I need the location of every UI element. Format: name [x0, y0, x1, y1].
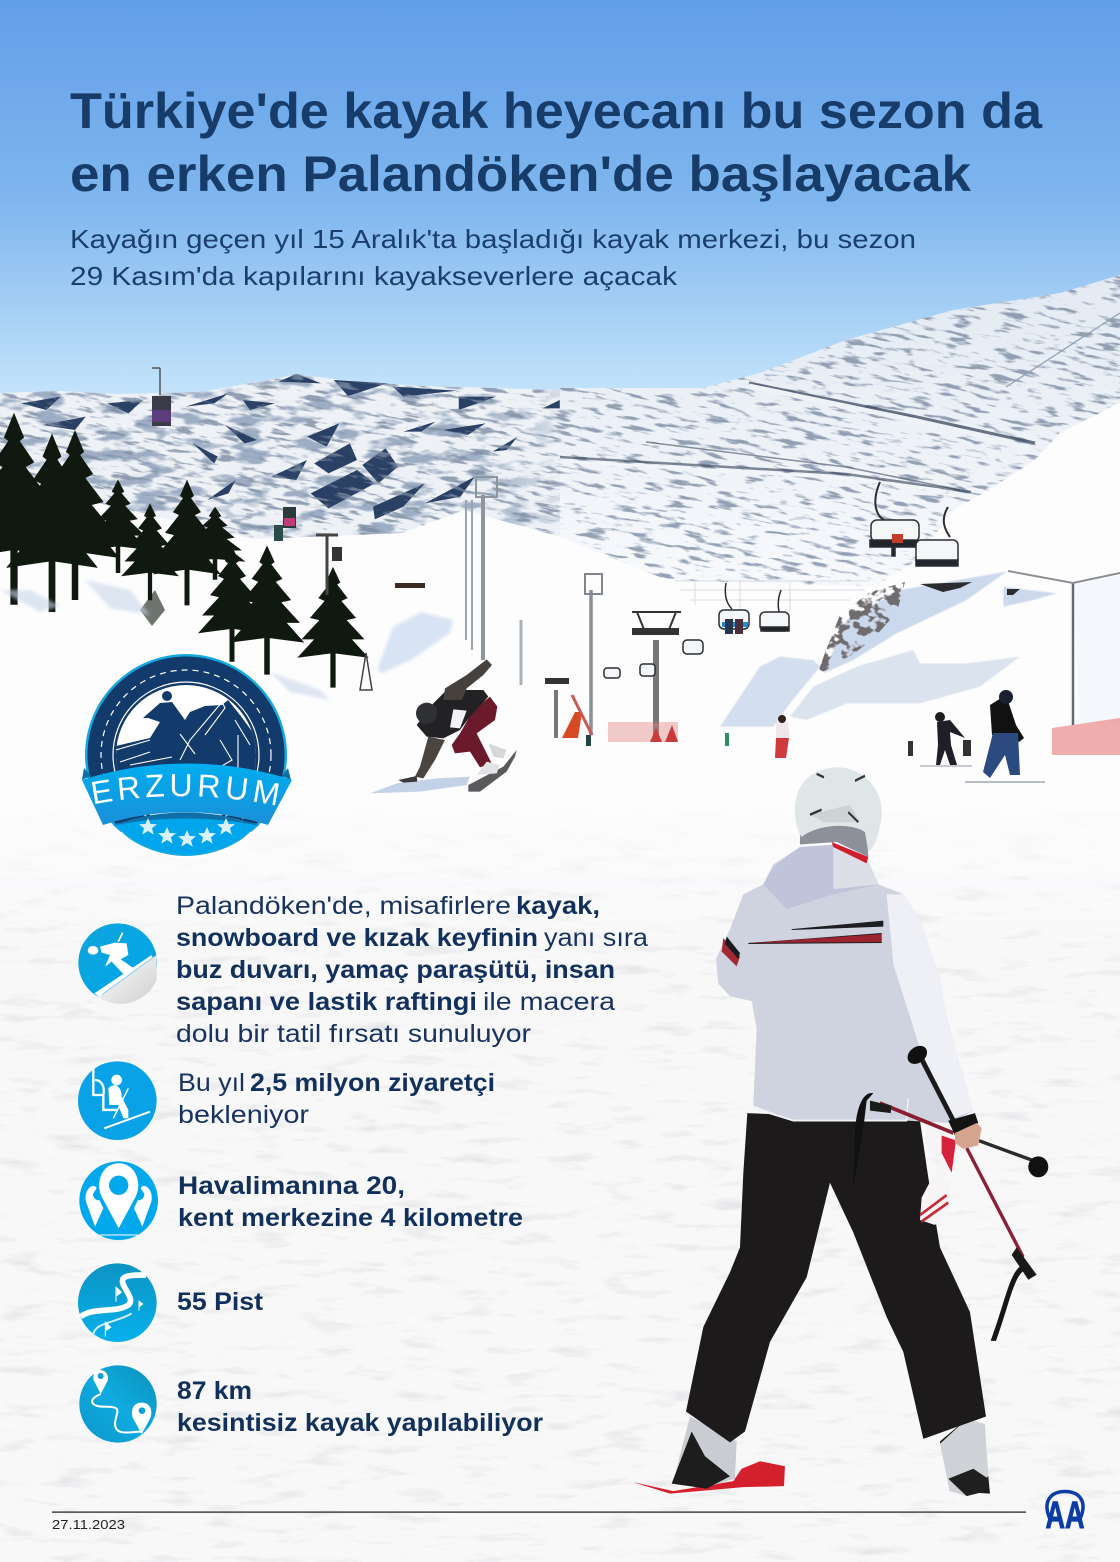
text block: kilometres — [177, 1377, 543, 1437]
sky background — [0, 0, 1120, 402]
logo: Anadolu Agency — [1046, 1492, 1084, 1537]
icon: location pin — [79, 1161, 158, 1240]
right mountain slope — [0, 275, 1120, 586]
text block: activities — [176, 892, 648, 1048]
lower snow tone — [0, 800, 1120, 1562]
subtitle: 29 Kasım'da kapılarını kayakseverlere açacak — [70, 261, 678, 291]
subtitle: Kayağın geçen yıl 15 Aralık'ta başladığı kayak merkezi, bu sezon — [70, 224, 916, 254]
ski lift towers — [466, 477, 1120, 738]
gondola lift cabins — [152, 368, 425, 690]
chairlift seats — [604, 482, 958, 678]
text block: activities: Palandöken'de, misafirlere — [176, 892, 511, 920]
icon: route — [79, 1365, 157, 1443]
snow ground base — [0, 400, 1120, 1562]
snow texture — [0, 800, 1120, 1562]
badge: Erzurum — [82, 654, 292, 856]
footer rule — [52, 1512, 1026, 1513]
faint fence — [675, 580, 870, 612]
text block: activities: kayak, — [516, 892, 600, 920]
text block: activities: yanı sıra — [544, 924, 648, 952]
rocky snow hump — [720, 572, 1120, 727]
subtitle — [70, 224, 916, 291]
title: en erken Palandöken'de başlayacak — [70, 146, 971, 202]
text block: distance: Havalimanına 20, — [178, 1172, 405, 1200]
icon: winding piste — [78, 1263, 157, 1342]
text block: visitors: 2,5 milyon ziyaretçi — [250, 1069, 495, 1097]
text block: kilometres: 87 km — [177, 1377, 252, 1405]
text block: visitors — [178, 1069, 495, 1129]
text block: activities: ile macera — [483, 988, 615, 1016]
badge illustration: skier and mountains — [116, 691, 256, 770]
mid snowboarder — [370, 659, 517, 793]
text block: activities: dolu bir tatil fırsatı sunuluyor — [176, 1020, 531, 1048]
text block: kilometres: kesintisiz kayak yapılabiliyor — [177, 1409, 543, 1437]
text block: visitors: bekleniyor — [178, 1101, 309, 1129]
icon: chairlift — [78, 1061, 157, 1140]
title — [70, 83, 1043, 202]
text block: activities: snowboard ve kızak keyfinin — [176, 924, 538, 952]
small snow mound — [377, 612, 453, 673]
back mountain range — [0, 374, 560, 539]
tree shadows on snow — [0, 580, 330, 700]
badge stars — [139, 818, 235, 847]
badge text: ERZURUM — [92, 774, 279, 806]
pine trees — [0, 413, 369, 688]
text block: visitors: Bu yıl — [178, 1069, 245, 1097]
logo: Anadolu Agency: AA — [1046, 1495, 1084, 1537]
white foreground slope — [0, 403, 1120, 1562]
text block: distance: kent merkezine 4 kilometre — [178, 1204, 523, 1232]
red safety nets — [562, 695, 1120, 755]
foreground skier — [633, 767, 1048, 1496]
title: Türkiye'de kayak heyecanı bu sezon da — [70, 83, 1043, 139]
text block: pistes: 55 Pist — [177, 1288, 264, 1316]
date: 27.11.2023 — [52, 1518, 125, 1532]
text block: activities: buz duvarı, yamaç paraşütü, insan — [176, 956, 615, 984]
icon: skier — [78, 923, 157, 1004]
text block: activities: sapanı ve lastik raftingi — [176, 988, 477, 1016]
text block: distance — [178, 1172, 523, 1232]
distant skiers — [586, 690, 1045, 782]
